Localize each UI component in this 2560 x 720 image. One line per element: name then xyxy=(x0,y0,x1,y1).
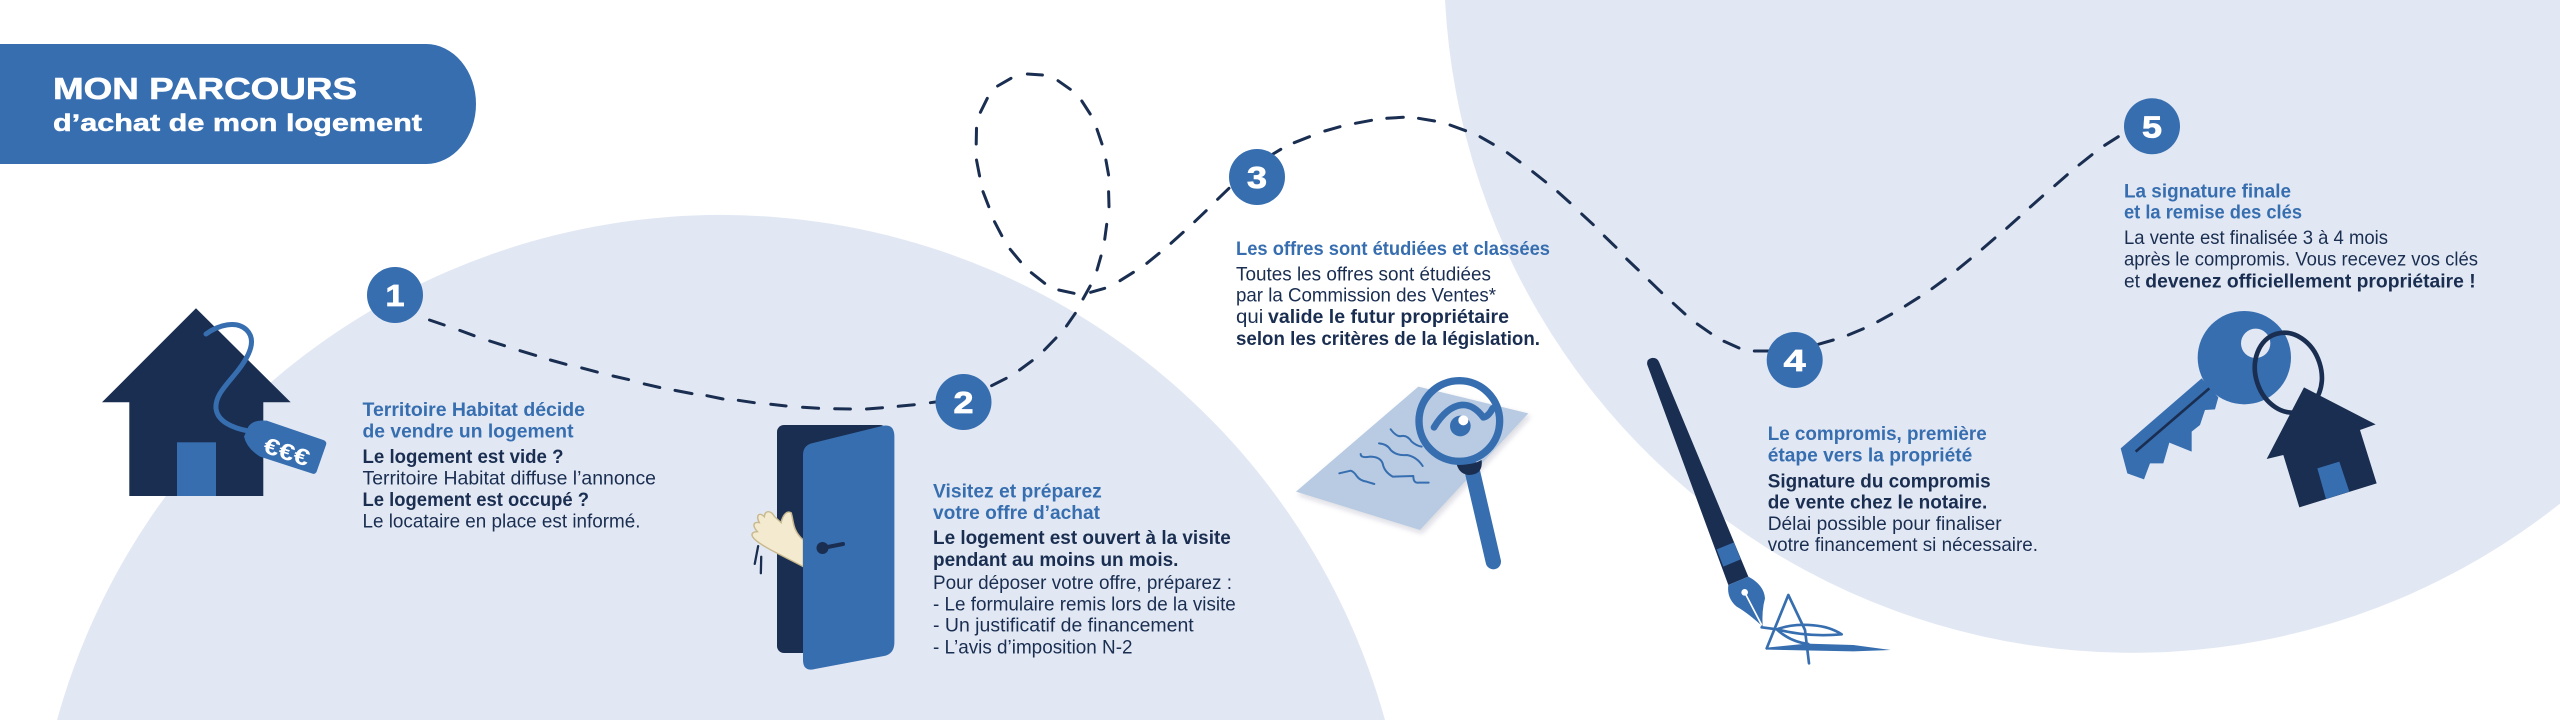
icon: house with price tag: €€€ xyxy=(260,432,313,471)
text: step 2 xyxy=(933,480,1236,658)
title banner xyxy=(0,44,476,164)
text: step 1: Territoire Habitat diffuse l’annonce xyxy=(362,468,656,490)
text: step 3: par la Commission des Ventes* xyxy=(1236,285,1496,307)
icon: document under magnifying glass xyxy=(1296,381,1528,562)
panel: step 3 xyxy=(1229,149,1550,562)
step number 2 xyxy=(936,374,992,430)
background lobe: left xyxy=(57,215,1385,720)
text: step 3: Toutes les offres sont étudiées xyxy=(1236,264,1491,286)
text: step 2: - L’avis d’imposition N-2 xyxy=(933,636,1132,658)
step number 3 xyxy=(1229,149,1285,205)
text: step 5: et xyxy=(2124,270,2141,292)
step number 4: 4 xyxy=(1784,343,1807,378)
text: step 4: étape vers la propriété xyxy=(1768,445,1972,467)
text: step 5: et la remise des clés xyxy=(2124,202,2302,224)
text: step 2: votre offre d’achat xyxy=(933,502,1100,524)
text: step 1: Le logement est vide ? xyxy=(362,446,564,468)
text: step 1: Territoire Habitat décide xyxy=(362,399,585,421)
panel: step 2 xyxy=(752,374,1236,670)
step number 1 xyxy=(367,267,423,323)
text: step 5 xyxy=(2124,180,2478,292)
text: step 5: devenez officiellement propriétaire ! xyxy=(2145,270,2476,292)
step number 4 xyxy=(1767,332,1823,388)
text: step 3: selon les critères de la législation. xyxy=(1236,328,1540,350)
text: step 2: pendant au moins un mois. xyxy=(933,549,1178,571)
text: step 4 xyxy=(1768,423,2038,556)
text: step 1: de vendre un logement xyxy=(362,420,574,442)
text: step 3 xyxy=(1236,238,1550,350)
text: step 3: Les offres sont étudiées et classées xyxy=(1236,238,1550,260)
text: step 2: - Un justificatif de financement xyxy=(933,615,1194,637)
text: step 1: Le logement est occupé ? xyxy=(362,489,589,511)
step number 1: 1 xyxy=(386,278,404,313)
text: step 1 xyxy=(362,399,656,532)
icon: house with price tag xyxy=(102,308,326,496)
text: step 3: qui xyxy=(1236,306,1263,328)
dashed journey path xyxy=(430,74,2118,409)
title banner: MON PARCOURS xyxy=(53,71,357,106)
text: step 2: Le logement est ouvert à la visite xyxy=(933,527,1231,549)
text: step 4: de vente chez le notaire. xyxy=(1768,491,1987,513)
step number 2: 2 xyxy=(954,385,974,420)
text: step 2: - Le formulaire remis lors de la visite xyxy=(933,593,1236,615)
panel: step 1 xyxy=(102,267,656,532)
text: step 4: Le compromis, première xyxy=(1768,423,1987,445)
step number 5 xyxy=(2124,98,2180,154)
icon: fountain pen with signature xyxy=(1647,358,1891,663)
text: step 4: votre financement si nécessaire. xyxy=(1768,534,2038,556)
text: step 5: après le compromis. Vous recevez vos clés xyxy=(2124,249,2478,271)
icon: door with waving hand xyxy=(752,425,894,670)
text: step 2: Pour déposer votre offre, préparez : xyxy=(933,572,1232,594)
text: step 4: Délai possible pour finaliser xyxy=(1768,513,2002,535)
text: step 3: valide le futur propriétaire xyxy=(1268,306,1509,328)
background lobe: right xyxy=(1445,0,2560,653)
icon: key and house keyring xyxy=(2121,311,2377,507)
title banner: d’achat de mon logement xyxy=(53,110,422,137)
text: step 2: Visitez et préparez xyxy=(933,480,1102,502)
text: step 5: La vente est finalisée 3 à 4 mois xyxy=(2124,227,2388,249)
text: step 4: Signature du compromis xyxy=(1768,470,1991,492)
panel: step 5 xyxy=(2121,98,2478,507)
step number 3: 3 xyxy=(1247,160,1267,195)
step number 5: 5 xyxy=(2142,109,2162,144)
panel: step 4 xyxy=(1647,332,2038,663)
text: step 5: La signature finale xyxy=(2124,180,2291,202)
text: step 1: Le locataire en place est informé. xyxy=(362,510,640,532)
